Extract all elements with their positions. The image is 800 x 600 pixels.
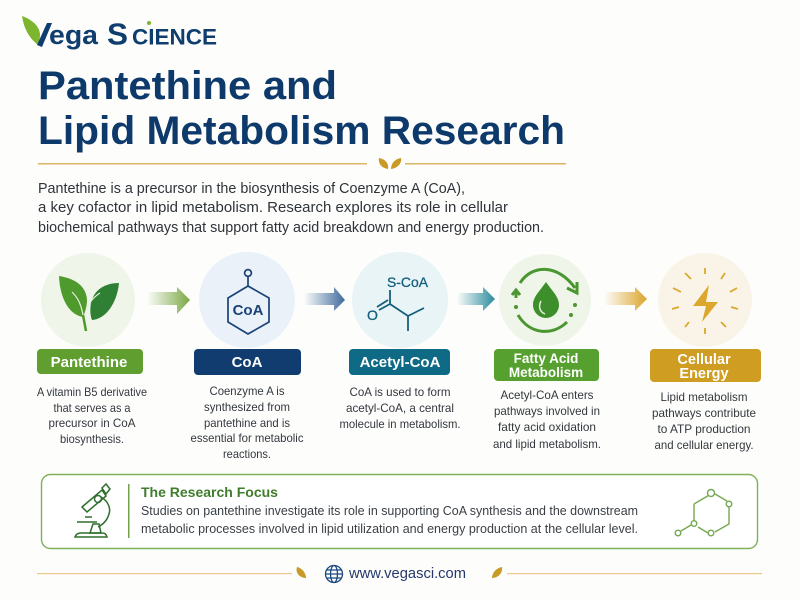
label — [37, 349, 143, 374]
description: that serves as a — [54, 401, 131, 415]
title — [38, 64, 565, 153]
website: www.vegasci.com — [348, 566, 466, 582]
icon: globe — [326, 566, 342, 582]
icon: acetyl structure: O — [367, 307, 378, 323]
description: Lipid metabolism — [660, 390, 748, 404]
description: and lipid metabolism. — [493, 437, 601, 451]
label — [494, 349, 599, 381]
icon: molecule — [675, 490, 732, 536]
description: and cellular energy. — [654, 438, 754, 452]
label: CoA — [232, 354, 263, 371]
icon: CoA hexagon — [199, 252, 295, 348]
icon: leaf right — [492, 567, 502, 578]
step: Cellular Energy — [650, 253, 761, 452]
logo: Vega Science: S — [107, 16, 128, 52]
arrow 4 — [604, 287, 647, 311]
icon: lightning bolt — [658, 253, 752, 347]
body text — [141, 503, 638, 536]
description: A vitamin B5 derivative — [37, 385, 147, 399]
description: molecule in metabolism. — [340, 417, 460, 431]
label — [650, 349, 761, 382]
description: Coenzyme A is — [210, 384, 284, 398]
description — [190, 384, 304, 461]
icon: CoA hexagon: CoA — [233, 302, 264, 319]
arrow 2 — [304, 287, 345, 311]
intro paragraph: a key cofactor in lipid metabolism. Research explores its role in cellular — [38, 200, 508, 216]
description — [340, 385, 460, 431]
description: essential for metabolic — [190, 431, 304, 445]
arrow 3 — [457, 287, 495, 311]
icon: acetyl structure: S-CoA — [387, 274, 429, 290]
step: CoA — [190, 252, 304, 461]
panel: research focus — [42, 474, 758, 548]
description: biosynthesis. — [60, 432, 124, 446]
label: Pantethine — [51, 354, 127, 371]
label — [194, 349, 301, 375]
description: synthesized from — [204, 400, 290, 414]
description: pathways involved in — [494, 404, 600, 418]
description — [493, 388, 601, 451]
label: Metabolism — [509, 365, 583, 380]
intro paragraph: Pantethine is a precursor in the biosynthesis of Coenzyme A (CoA), — [38, 181, 465, 197]
title: Lipid Metabolism Research — [38, 109, 565, 153]
label: Energy — [679, 366, 729, 382]
step: Pantethine — [37, 253, 147, 446]
description: pathways contribute — [652, 406, 756, 420]
description: CoA is used to form — [350, 385, 450, 399]
label: Acetyl-CoA — [360, 354, 441, 371]
body text: metabolic processes involved in lipid utilization and energy production at the cellular level. — [141, 521, 638, 536]
intro paragraph — [38, 181, 544, 236]
description: acetyl-CoA, a central — [346, 401, 454, 415]
title: Pantethine and — [38, 64, 337, 108]
icon: microscope — [75, 484, 110, 537]
arrow 1 — [147, 287, 190, 314]
step: Acetyl-CoA — [340, 252, 460, 431]
intro paragraph: biochemical pathways that support fatty acid breakdown and energy production. — [38, 220, 544, 236]
icon: lipid cycle drop — [499, 254, 591, 346]
description: reactions. — [223, 447, 271, 461]
icon: acetyl structure — [352, 252, 448, 348]
description: to ATP production — [658, 422, 750, 436]
body text: Studies on pantethine investigate its role in supporting CoA synthesis and the downstream — [141, 503, 638, 518]
logo: Vega Science: ega — [49, 20, 99, 50]
description — [37, 385, 147, 446]
icon: leaves — [41, 253, 135, 347]
heading: The Research Focus — [141, 484, 278, 500]
icon: leaf left — [297, 567, 306, 578]
step: Fatty Acid Metabolism — [493, 254, 601, 451]
logo: Vega Science: CIENCE — [132, 24, 217, 50]
logo: Vega Science — [22, 16, 217, 52]
label: Cellular — [677, 352, 731, 368]
description: pantethine and is — [204, 416, 290, 430]
description — [652, 390, 756, 452]
description: fatty acid oxidation — [498, 420, 596, 434]
title divider with leaves — [38, 158, 566, 169]
label: Fatty Acid — [514, 351, 578, 366]
description: precursor in CoA — [48, 416, 136, 430]
description: Acetyl-CoA enters — [500, 388, 594, 402]
label — [349, 349, 450, 375]
footer — [37, 566, 762, 582]
